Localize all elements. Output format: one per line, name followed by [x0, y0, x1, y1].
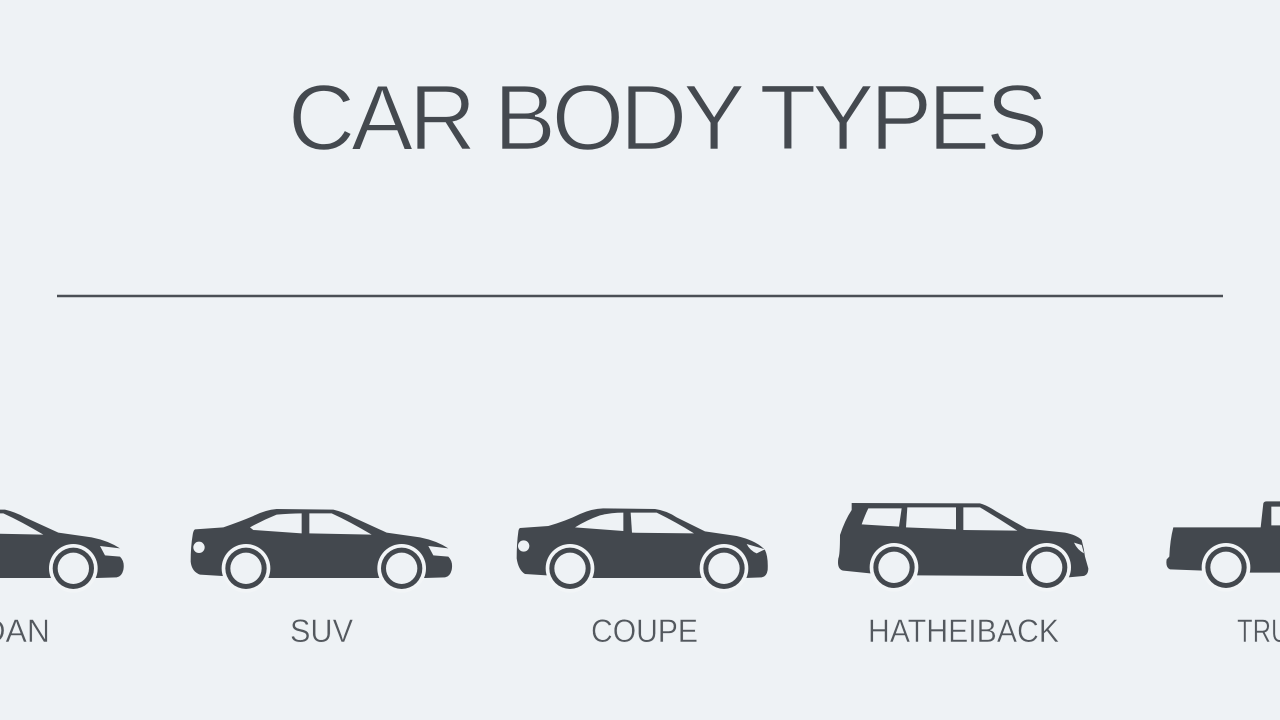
- label: hatchback: HATHEIBACK: [868, 613, 1059, 649]
- label: suv: SUV: [290, 613, 354, 649]
- panel: sedan: [0, 509, 124, 649]
- panel: hatchback: [838, 503, 1088, 649]
- title: CAR BODY TYPES: [288, 66, 1048, 170]
- panel: coupe: [517, 508, 768, 649]
- panel: truck: [1166, 501, 1280, 649]
- icon: hatchback car: [838, 503, 1088, 592]
- icon: pickup truck: [1166, 501, 1280, 592]
- label: coupe: COUPE: [591, 613, 698, 649]
- panel: suv: [191, 509, 452, 649]
- icon: sedan car: [0, 509, 124, 593]
- icon: suv car: [191, 509, 452, 593]
- icon: coupe car: [517, 508, 768, 593]
